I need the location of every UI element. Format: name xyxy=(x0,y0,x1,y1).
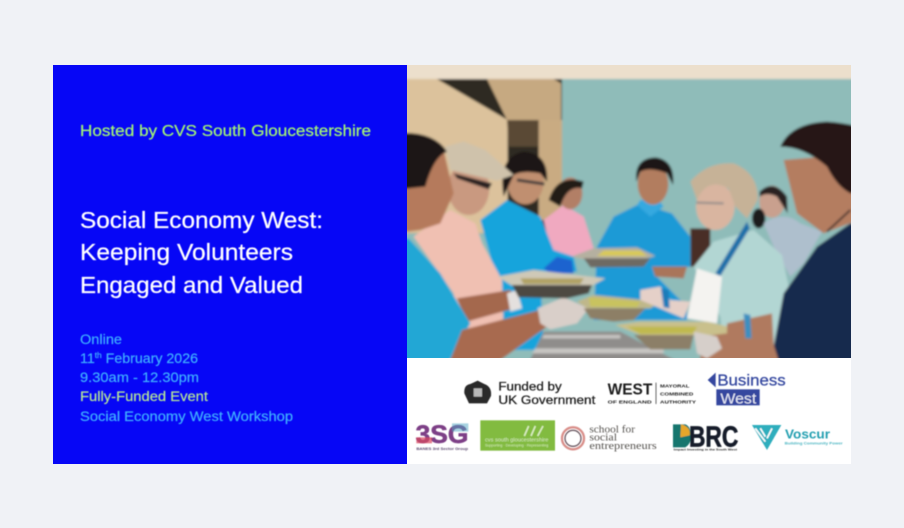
logo: CVS South Gloucestershire xyxy=(480,420,555,451)
volunteer in blue polo with glasses xyxy=(480,200,577,350)
event details: Social Economy West Workshop xyxy=(80,409,293,424)
older woman with apron xyxy=(694,230,789,347)
logo: West of England: OF ENGLAND xyxy=(608,399,652,405)
title: Engaged and Valued xyxy=(80,272,303,298)
logo: West of England: WEST xyxy=(608,381,653,398)
logo: BRC: Impact Investing in the South West xyxy=(674,448,737,452)
panel: blue event details xyxy=(53,65,407,464)
background xyxy=(407,78,851,358)
logo: UK Government: UK Government xyxy=(498,393,596,407)
event details: February 2026 xyxy=(102,351,198,366)
logo: School for Social Entrepreneurs xyxy=(562,424,657,452)
logo: Business West: West xyxy=(720,391,756,407)
logo: Voscur: Building Community Power xyxy=(785,442,843,446)
event details: th xyxy=(95,351,102,360)
logo: Business West: Business xyxy=(717,373,786,390)
logo: West of England: AUTHORITY xyxy=(660,399,697,405)
host line: Hosted by CVS South Gloucestershire xyxy=(80,123,371,140)
background volunteer right xyxy=(759,186,785,218)
logo: Business West xyxy=(708,373,786,407)
logo: West of England: MAYORAL xyxy=(660,383,689,389)
title: Social Economy West: xyxy=(80,207,323,233)
event details: Fully-Funded Event xyxy=(80,389,208,404)
event details: Online xyxy=(80,332,122,347)
logo: BRC xyxy=(673,422,738,454)
tray held by woman in pink xyxy=(498,270,605,287)
event details: 9.30am - 12.30pm xyxy=(80,370,199,385)
logo: UK Government xyxy=(464,380,596,407)
logo: West of England: COMBINED xyxy=(660,391,694,397)
logo: BRC: BRC xyxy=(689,422,738,454)
title xyxy=(80,207,323,298)
logo: UK Government: Funded by xyxy=(498,380,563,394)
logo: CVS South Gloucestershire: cvs south gloucestershire xyxy=(485,437,548,443)
event details xyxy=(80,332,293,424)
logo: School for Social Entrepreneurs: social xyxy=(589,432,617,443)
volunteer in pink shirt and cap xyxy=(414,210,504,330)
man in blue polo xyxy=(594,203,690,320)
logo: Voscur: Voscur xyxy=(785,428,830,442)
logo: School for Social Entrepreneurs: entrepreneurs xyxy=(589,441,657,452)
logo: School for Social Entrepreneurs: school for xyxy=(589,424,636,435)
serving tray stand xyxy=(530,330,673,358)
event card xyxy=(53,65,851,464)
title: Keeping Volunteers xyxy=(80,239,293,265)
front tray xyxy=(615,322,735,335)
tray held by man xyxy=(572,247,655,260)
central tray xyxy=(577,295,660,308)
logo: Voscur xyxy=(752,425,843,450)
woman on the right xyxy=(772,222,851,358)
photo: volunteers serving food xyxy=(407,65,851,358)
back volunteer pink xyxy=(544,205,594,263)
logo: 3SG: BANES 3rd Sector Group xyxy=(416,447,469,451)
event details: 11 xyxy=(80,351,94,366)
volunteer in teal shirt, left xyxy=(407,152,454,233)
logo: CVS South Gloucestershire: Supporting · Developing · Representing xyxy=(485,444,548,448)
logo: 3SG: 3SG xyxy=(416,421,468,449)
panel: funders and partners logos xyxy=(407,358,851,464)
logo: West of England xyxy=(608,381,697,405)
